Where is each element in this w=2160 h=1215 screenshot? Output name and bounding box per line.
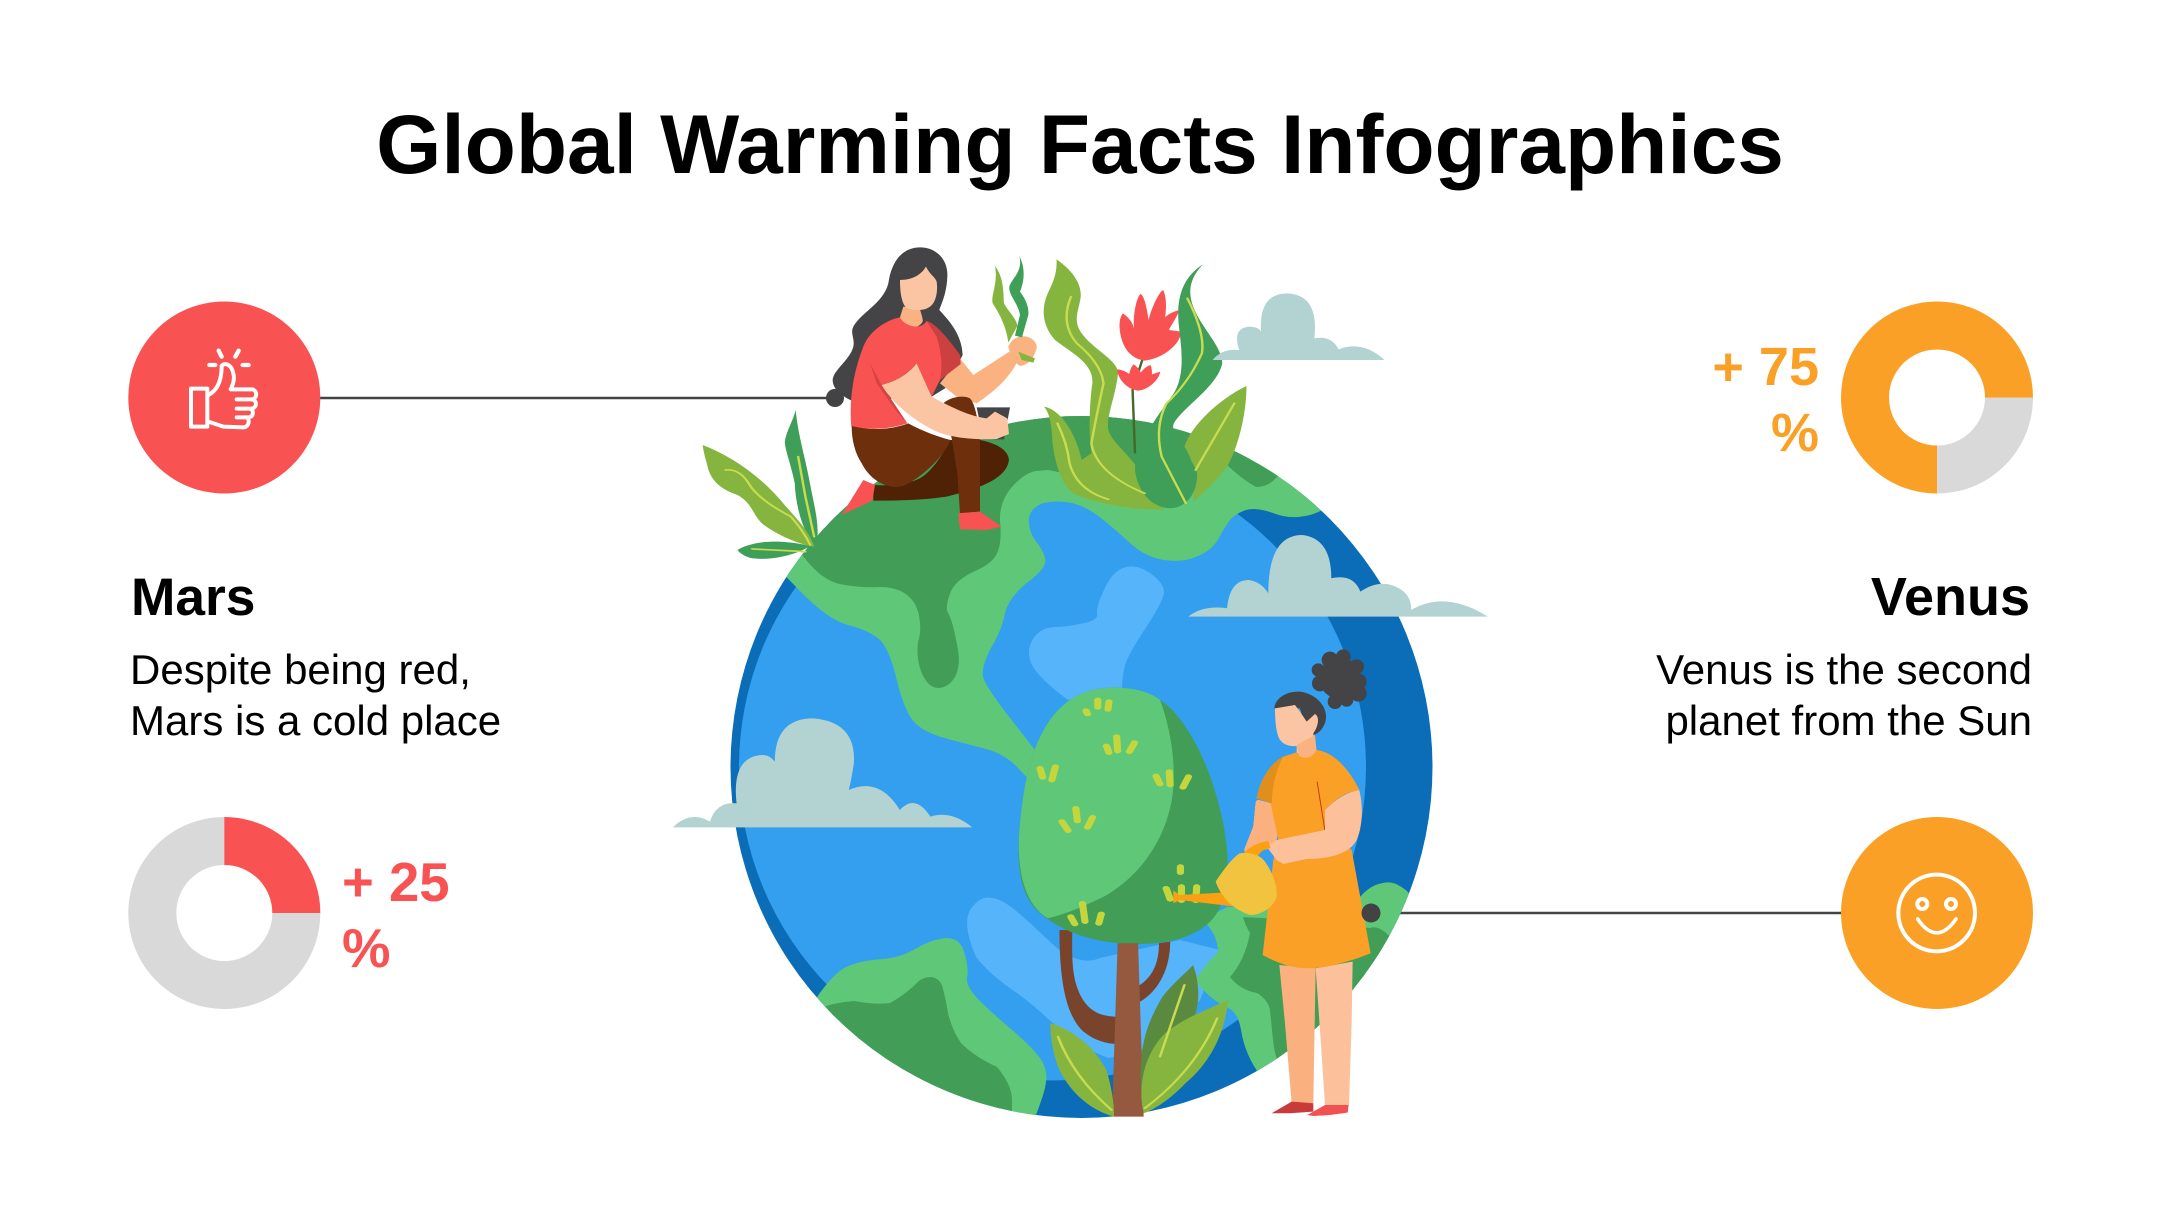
back arm (1243, 799, 1278, 853)
shoes (1272, 1102, 1313, 1113)
sprout in hand (992, 266, 1017, 343)
panel: Mars (128, 302, 501, 1009)
heading: Mars: Mars (131, 568, 255, 627)
connector dot: Mars (826, 389, 844, 407)
tree branches (1059, 930, 1117, 1044)
figure: seated woman (826, 247, 1037, 530)
tree crown marks (1040, 700, 1197, 924)
leaves at the trunk (1141, 965, 1198, 1100)
connector line: Mars (320, 397, 835, 399)
front leg (944, 397, 980, 513)
heading: Venus: Venus (1871, 567, 2030, 627)
plant: right cluster (1044, 259, 1246, 509)
pants (873, 440, 1009, 501)
donut chart: 75 percent (1841, 302, 2033, 494)
stat: +25%: + 25 (342, 852, 450, 913)
cloud: top right (1213, 293, 1385, 360)
cloud: left (673, 718, 972, 827)
globe (730, 380, 1450, 1140)
plants on top of the globe (703, 259, 1246, 559)
flower stems (1133, 360, 1142, 453)
neck and face (900, 307, 923, 328)
continent: bottom left light (816, 938, 1046, 1115)
illustration: globe with people and plants (673, 247, 1488, 1140)
text: Mars description: Despite being red, (130, 646, 471, 693)
face (1275, 705, 1318, 753)
shirt (851, 317, 961, 429)
continent: north america light (786, 416, 1322, 778)
flowers (1119, 290, 1181, 361)
text: Venus description: Venus is the second (1656, 646, 2032, 693)
continent: bottom right dark (1230, 917, 1390, 1059)
text: Mars description: Mars is a cold place (130, 697, 501, 744)
icon: smiley in orange circle (1841, 817, 2033, 1009)
light blue patch upper (1029, 566, 1164, 700)
text: Venus description: planet from the Sun (1665, 697, 2032, 744)
hair (833, 247, 963, 401)
panel: Venus (1656, 302, 2033, 1009)
connector dot: Venus (1362, 904, 1380, 922)
donut chart: 25 percent (128, 817, 320, 1009)
hair (1274, 692, 1326, 735)
stat: +25%: % (342, 918, 390, 979)
light blue patch lower (967, 898, 1220, 1058)
watering can (1173, 841, 1277, 915)
continent: bottom left dark (825, 977, 1012, 1111)
shoes (842, 480, 875, 515)
tree crown (1018, 688, 1228, 944)
plant: left (703, 410, 818, 559)
near arm (882, 363, 1009, 439)
title: Global Warming Facts Infographics (376, 97, 1784, 191)
figure: standing woman with watering can (1173, 649, 1371, 1116)
continent: north america dark (802, 416, 1278, 688)
near arm (1267, 790, 1362, 864)
cloud: middle right (1188, 535, 1488, 617)
continent: bottom right light (1196, 882, 1409, 1071)
tree trunk (1112, 943, 1144, 1117)
cup (977, 407, 1010, 439)
hair bun (1312, 649, 1367, 709)
tree (1018, 688, 1228, 1117)
stat: +75%: + 75 (1712, 337, 1819, 397)
far arm (940, 352, 1017, 403)
legs (1279, 965, 1316, 1103)
connector line: Venus (1371, 912, 1841, 914)
stat: +75%: % (1771, 403, 1819, 463)
dress (1257, 750, 1371, 968)
icon: thumbs up in red circle (128, 302, 320, 494)
